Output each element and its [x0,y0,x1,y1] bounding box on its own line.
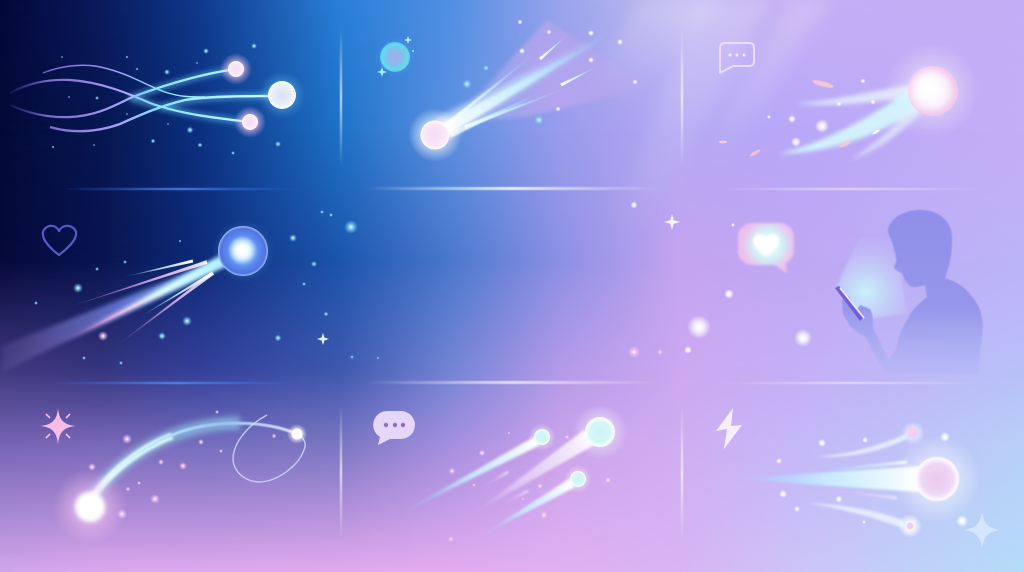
panel: bottom right comets [716,408,1000,548]
dots [448,432,612,542]
dots [776,432,968,527]
panel: middle left comet [2,210,380,372]
panel: top center comet [375,12,653,162]
panel: top left branching streams [10,43,306,155]
chat icon outline [720,43,754,73]
comet heads [915,457,959,501]
arc head and tip [52,469,128,545]
phone [835,286,864,321]
comet streaks [778,85,926,160]
streaks [393,430,596,542]
comet head [211,219,275,283]
panel: bottom center comets [373,404,628,542]
heart outline icon [43,226,76,255]
small sparkle [317,333,329,345]
star icon [40,408,76,445]
comet heads [572,404,628,460]
chat bubble with heart [738,223,794,274]
comet streaks [434,12,632,140]
chat icon [373,411,415,445]
person silhouette [842,210,983,373]
teal orb icon [375,36,415,77]
scattered dots [52,43,281,155]
arc trail [92,415,305,498]
stream glow [130,69,282,122]
panel: bottom left arc comet [40,408,307,545]
glows and dots [628,202,812,358]
comet head [908,66,958,116]
panel: middle right person with phone [628,202,983,373]
comet outer glow [893,435,981,523]
comet outer glow [884,42,980,138]
ember sparks [719,78,880,157]
comet streaks [2,253,232,372]
scattered dots [88,410,276,519]
light rays upper right [590,0,830,240]
lightning icon [716,408,742,449]
stream lines [10,65,282,131]
scattered dots [34,210,380,365]
comet haze wedge [453,20,653,123]
comet head [408,108,462,162]
scattered dots [462,20,638,125]
sparkle [964,512,1000,548]
panel: top right comet [719,42,980,160]
streaks [730,434,920,528]
phone light beam [837,237,907,320]
stream nodes [220,53,252,85]
